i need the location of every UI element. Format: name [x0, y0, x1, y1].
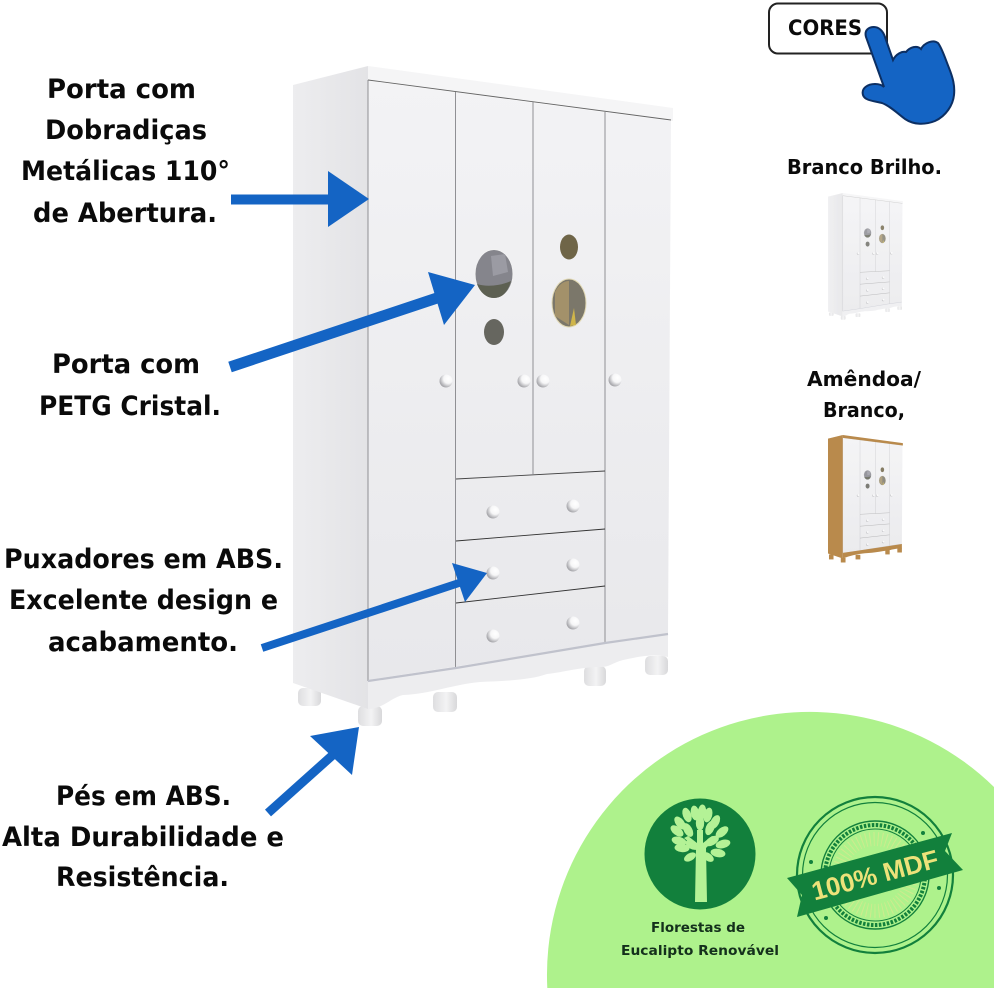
- plinth line: [368, 634, 668, 681]
- label: white colour: Branco Brilho.: [787, 155, 942, 179]
- text: handles: acabamento.: [48, 627, 238, 658]
- label: almond colour: Branco,: [823, 398, 905, 422]
- text: hinges: de Abertura.: [33, 198, 217, 229]
- wardrobe front: [368, 81, 671, 680]
- text: feet: Resistência.: [56, 862, 229, 893]
- wardrobe top strip: [368, 66, 673, 121]
- panel: green eco circle: [547, 712, 994, 988]
- text: handles: Puxadores em ABS.: [4, 544, 283, 575]
- thumbnail: almond wardrobe: [828, 435, 903, 562]
- icon: pointing hand: [863, 27, 954, 124]
- arrow: hinges: [231, 171, 369, 227]
- text: eucalyptus forests: Florestas de: [651, 920, 745, 936]
- colours button: CORES: [788, 16, 862, 40]
- text: handles: Excelente design e: [9, 585, 278, 616]
- text: hinges: Porta com: [47, 74, 196, 105]
- door and drawer lines: [368, 80, 671, 681]
- text: feet: Pés em ABS.: [56, 781, 231, 812]
- PETG windows: [475, 234, 586, 345]
- text: eucalyptus forests: Eucalipto Renovável: [621, 943, 779, 959]
- text: hinges: Metálicas 110°: [21, 156, 230, 187]
- wardrobe feet: [298, 656, 668, 726]
- badge: 100% MDF stamp: 100% MDF: [808, 844, 942, 906]
- wardrobe side panel: [293, 66, 368, 709]
- label: almond colour: [807, 367, 922, 422]
- text: eucalyptus forests: [621, 920, 779, 959]
- badge: 100% MDF stamp: [787, 797, 963, 953]
- text: PETG door: PETG Cristal.: [39, 391, 221, 422]
- thumbnail: white wardrobe: [828, 193, 903, 320]
- wardrobe product photo: [293, 66, 673, 726]
- colours button: [769, 4, 887, 54]
- text: PETG door: [39, 349, 221, 422]
- knobs: [440, 374, 622, 642]
- text: hinges: Dobradiças: [45, 115, 207, 146]
- icon: tree badge: [644, 798, 756, 910]
- arrow: PETG door: [230, 272, 475, 367]
- text: feet: Alta Durabilidade e: [2, 822, 284, 853]
- text: feet: [2, 781, 284, 893]
- label: almond colour: Amêndoa/: [807, 367, 922, 391]
- arrow: handles: [262, 563, 487, 648]
- wardrobe base: [368, 634, 668, 709]
- text: hinges: [21, 74, 230, 229]
- text: handles: [4, 544, 283, 658]
- text: PETG door: Porta com: [52, 349, 200, 380]
- arrow: feet: [268, 727, 359, 813]
